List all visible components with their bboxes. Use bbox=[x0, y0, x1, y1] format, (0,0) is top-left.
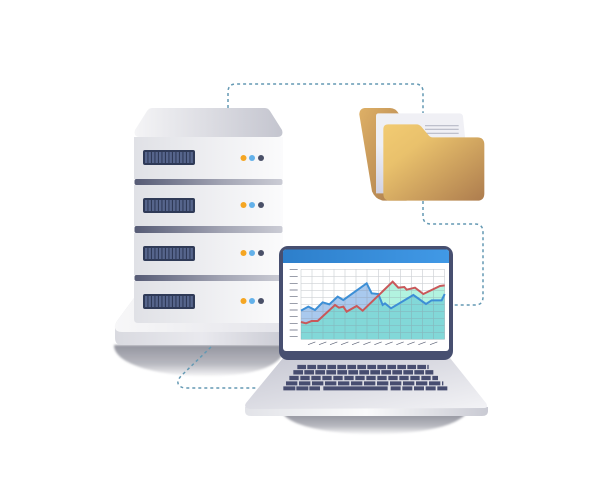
laptop screen bbox=[283, 250, 449, 351]
server unit 4 bbox=[134, 281, 283, 323]
paper sheet bbox=[376, 113, 465, 193]
y axis ticks bbox=[290, 269, 298, 337]
paper text lines bbox=[425, 126, 459, 133]
dashed connector: server to folder bbox=[228, 84, 423, 113]
line and area chart bbox=[290, 269, 445, 345]
server unit 2 bbox=[134, 185, 283, 233]
laptop deck bbox=[245, 358, 488, 416]
screen header bar bbox=[283, 250, 449, 263]
area: blue series bbox=[301, 283, 445, 339]
infographic illustration bbox=[112, 83, 488, 434]
icon: folder bbox=[359, 108, 484, 201]
laptop screen bezel bbox=[279, 246, 453, 360]
server base plate bbox=[115, 298, 290, 345]
server top cap bbox=[135, 108, 282, 137]
dashed connector: server base to laptop bbox=[178, 347, 258, 388]
folder back bbox=[359, 108, 407, 201]
server rack bbox=[134, 108, 283, 323]
red series line bbox=[301, 282, 445, 323]
server unit 3 bbox=[134, 233, 283, 281]
dashed connector: folder to laptop bbox=[423, 201, 483, 305]
laptop bbox=[245, 246, 488, 434]
laptop shadow bbox=[283, 414, 466, 434]
keyboard bbox=[283, 367, 449, 388]
blue series line bbox=[301, 283, 445, 311]
chart grid bbox=[301, 269, 445, 339]
server unit 1 bbox=[134, 137, 283, 185]
server base shadow bbox=[114, 345, 285, 376]
x axis ticks bbox=[308, 342, 437, 345]
folder front bbox=[383, 124, 484, 201]
area: red series bbox=[301, 282, 445, 339]
area: overlap bbox=[301, 296, 444, 340]
